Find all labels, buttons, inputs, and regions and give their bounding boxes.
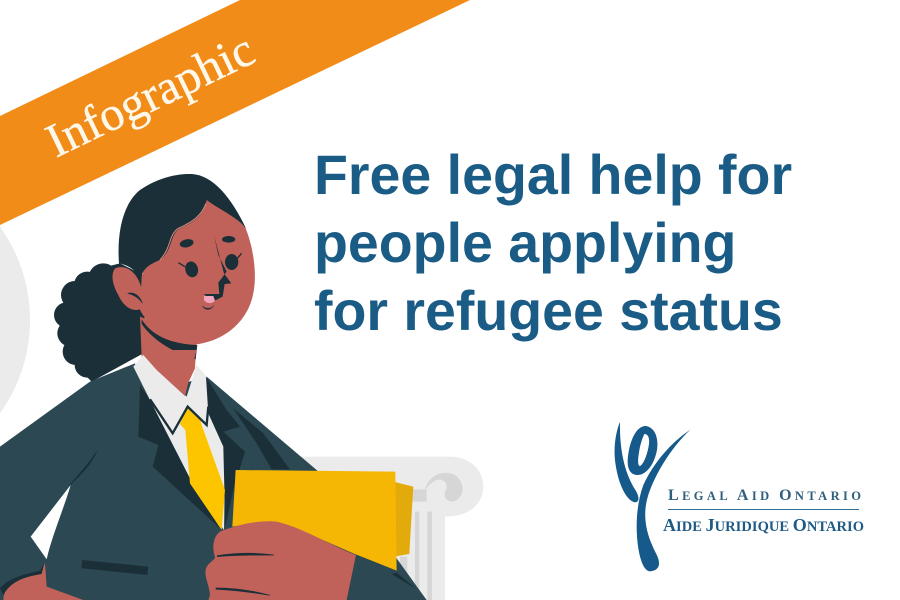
logo French name: AIDE JURIDIQUE ONTARIO bbox=[663, 515, 864, 535]
collar outline bbox=[150, 399, 208, 433]
ear bbox=[113, 267, 143, 310]
logo divider bbox=[668, 509, 859, 510]
logo figure bbox=[615, 422, 691, 571]
folder bbox=[232, 470, 413, 571]
logo English name: L EGAL A ID O NTARIO bbox=[668, 487, 861, 504]
illustration: woman bbox=[0, 174, 427, 600]
hand bbox=[0, 521, 356, 600]
jacket and torso bbox=[0, 350, 427, 600]
hair top bbox=[119, 174, 246, 277]
title: for refugee status bbox=[314, 280, 783, 342]
head bbox=[113, 174, 255, 344]
logo: Legal Aid Ontario bbox=[615, 422, 864, 571]
neck front bbox=[143, 350, 197, 396]
background circle bbox=[0, 160, 30, 480]
sleeve shadow bbox=[392, 573, 417, 589]
lapels bbox=[138, 385, 220, 528]
title: Free legal help for bbox=[314, 144, 792, 206]
nose bbox=[204, 235, 231, 302]
arm gap bbox=[31, 485, 71, 559]
hairline highlight bbox=[160, 203, 206, 260]
face bbox=[140, 193, 255, 344]
background column bbox=[300, 457, 483, 600]
shirt bbox=[133, 354, 225, 530]
neck bbox=[137, 317, 197, 390]
hair bun bbox=[54, 263, 147, 382]
pocket bbox=[81, 560, 148, 575]
ear inner bbox=[128, 293, 142, 303]
tie bbox=[180, 407, 225, 530]
eyes bbox=[183, 260, 200, 279]
jacket fold line bbox=[70, 452, 97, 485]
brows bbox=[179, 238, 194, 249]
mouth bbox=[204, 296, 215, 303]
title: people applying bbox=[314, 212, 736, 274]
orange banner bbox=[0, 0, 470, 225]
banner label: Infographic bbox=[38, 23, 263, 168]
